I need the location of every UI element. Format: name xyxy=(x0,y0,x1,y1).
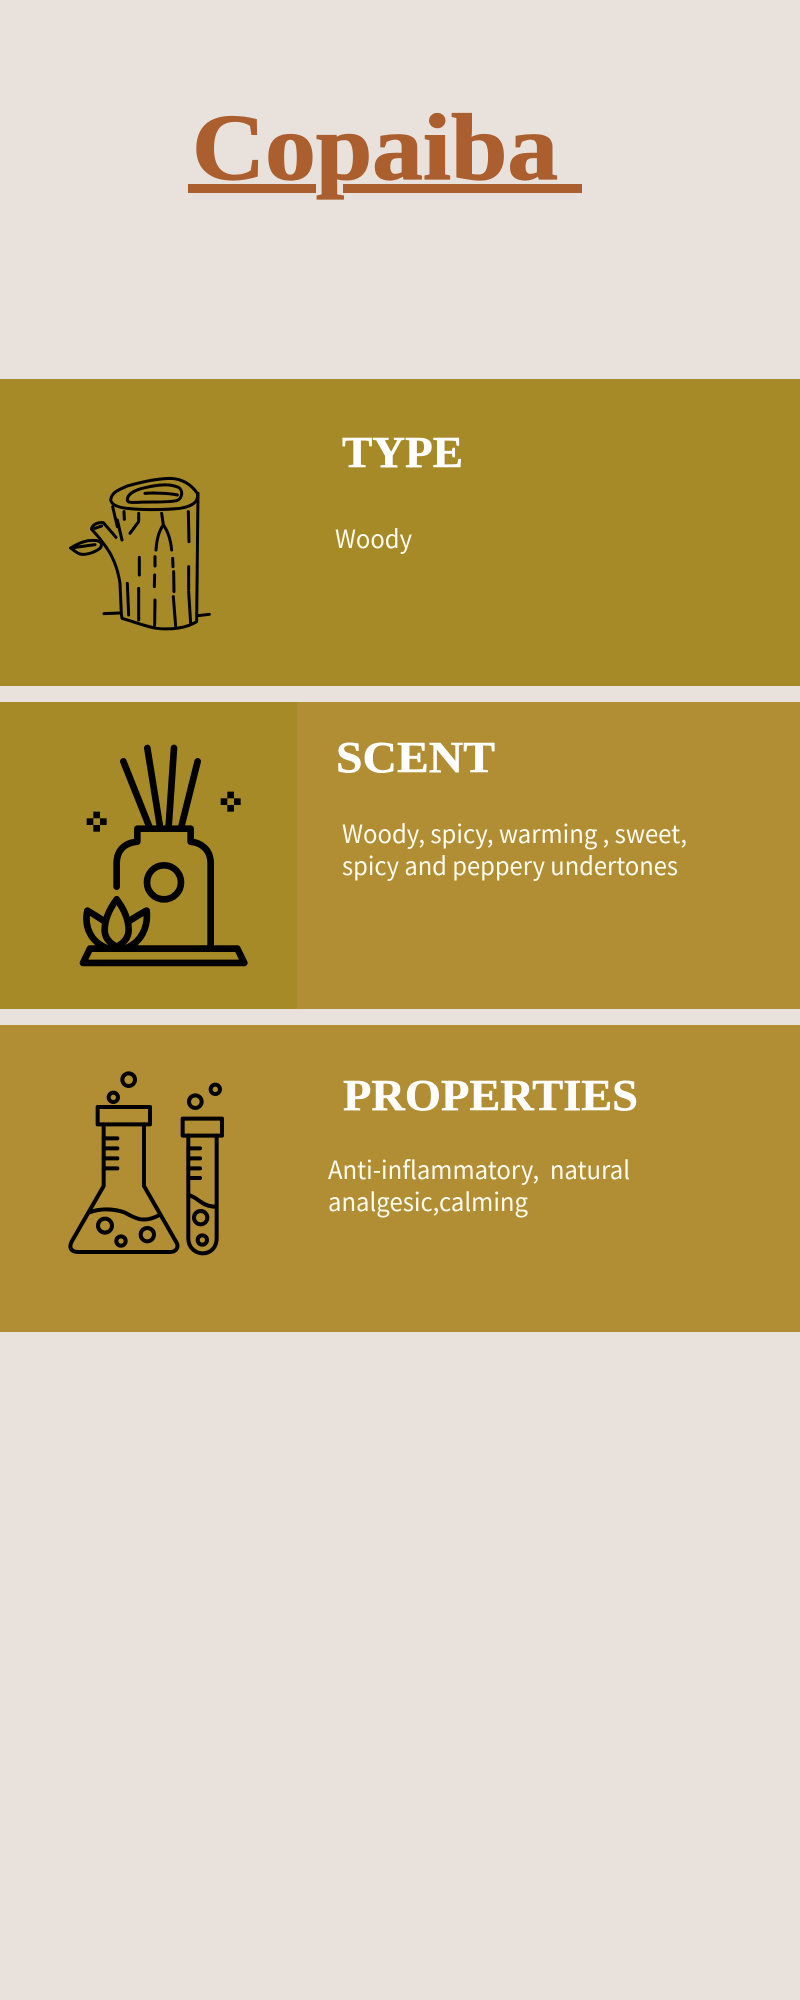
icon: tree stump xyxy=(71,478,209,629)
icon: reed diffuser xyxy=(83,748,244,963)
panel: type xyxy=(0,379,800,686)
text: properties xyxy=(328,1151,630,1219)
text: scent xyxy=(342,815,687,883)
text: scent: Woody, spicy, warming , sweet, xyxy=(342,815,687,851)
heading: properties: PROPERTIES xyxy=(343,1071,638,1120)
panel: properties xyxy=(0,1025,800,1332)
heading: type: TYPE xyxy=(342,428,463,477)
title: Copaiba xyxy=(192,96,558,200)
text: scent: spicy and peppery undertones xyxy=(342,847,678,883)
text: type: Woody xyxy=(335,520,412,556)
text: properties: analgesic,calming xyxy=(328,1183,528,1219)
sparkle left xyxy=(87,812,107,832)
heading: scent: SCENT xyxy=(336,733,495,782)
text: properties: Anti-inflammatory, natural xyxy=(328,1151,630,1187)
panel: scent xyxy=(0,702,800,1009)
icon: lab flask and test tube xyxy=(70,1073,222,1253)
sparkle right xyxy=(221,792,241,812)
